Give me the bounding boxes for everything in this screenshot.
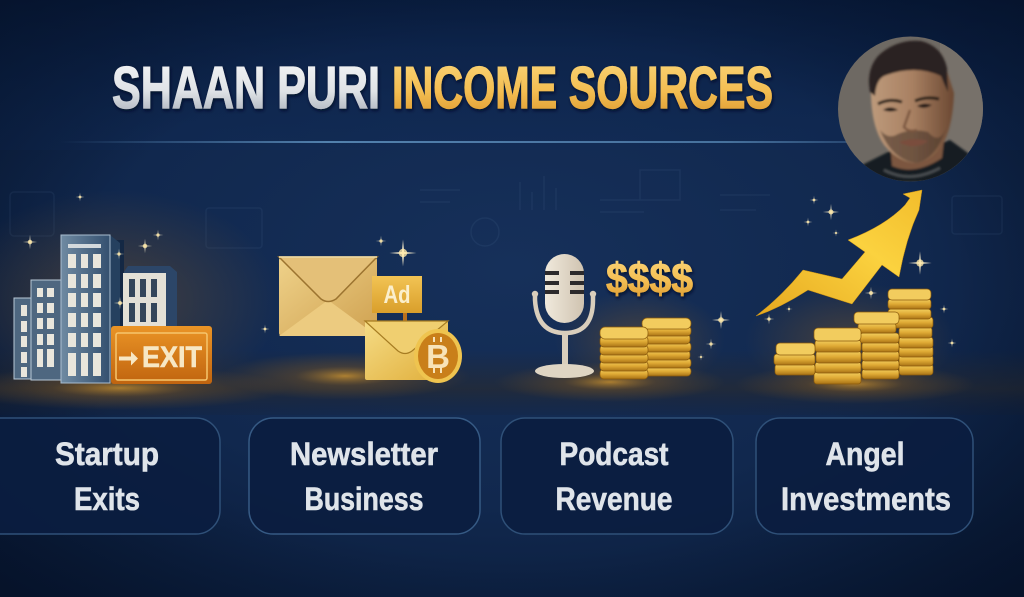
sparkles — [23, 192, 163, 309]
label: Revenue: Revenue — [556, 481, 672, 517]
label: Investments: Investments — [781, 481, 951, 517]
right coin stack — [642, 318, 691, 376]
exit sign — [111, 326, 212, 384]
bitcoin coin — [414, 329, 462, 383]
tallest coin stack — [888, 289, 933, 375]
title: gold part: INCOME SOURCES — [392, 55, 773, 121]
panel: Startup Exits — [0, 418, 220, 534]
third coin stack — [854, 312, 899, 379]
icon: podcast microphone — [495, 254, 730, 402]
icon: angel investment growth — [735, 190, 975, 404]
ad tag — [372, 276, 422, 322]
panel: Angel Investments — [756, 418, 973, 534]
brows — [878, 98, 939, 104]
mouth — [904, 140, 926, 146]
large envelope — [279, 257, 377, 336]
label: Exits: Exits — [74, 481, 140, 517]
tall building — [61, 235, 120, 383]
title: white part: SHAAN PURI — [112, 55, 380, 121]
stubble — [880, 130, 944, 164]
icon: startup exit buildings — [0, 190, 290, 410]
far right building — [110, 240, 177, 330]
label: Business: Business — [304, 481, 424, 517]
dollar signs: $$$$ — [606, 255, 693, 303]
panel: Newsletter Business — [249, 418, 480, 534]
neck — [889, 142, 946, 172]
label: Podcast: Podcast — [560, 436, 669, 472]
label: Angel: Angel — [826, 436, 904, 472]
bitcoin coin: B — [426, 338, 450, 375]
icon: newsletter envelopes — [220, 236, 470, 400]
sparkles — [697, 311, 730, 361]
rising arrow — [756, 190, 922, 316]
portrait: Shaan Puri — [836, 35, 986, 185]
clothing — [863, 139, 968, 182]
nose — [904, 110, 917, 131]
face — [871, 68, 954, 163]
title — [112, 55, 773, 121]
smallest coin stack — [774, 343, 815, 375]
left coin stack — [600, 327, 648, 379]
middle building — [31, 280, 61, 380]
exit sign: EXIT — [142, 341, 202, 374]
eyes — [883, 104, 932, 112]
second coin stack — [814, 328, 861, 384]
sparkles — [764, 196, 956, 348]
left building — [14, 298, 31, 379]
small envelope — [365, 321, 448, 380]
microphone — [532, 254, 596, 378]
label: Startup: Startup — [55, 436, 159, 472]
label: Newsletter: Newsletter — [290, 436, 438, 472]
hair — [869, 41, 948, 96]
sparkles — [260, 236, 416, 334]
ad tag: Ad — [384, 281, 410, 309]
panel: Podcast Revenue — [501, 418, 733, 534]
